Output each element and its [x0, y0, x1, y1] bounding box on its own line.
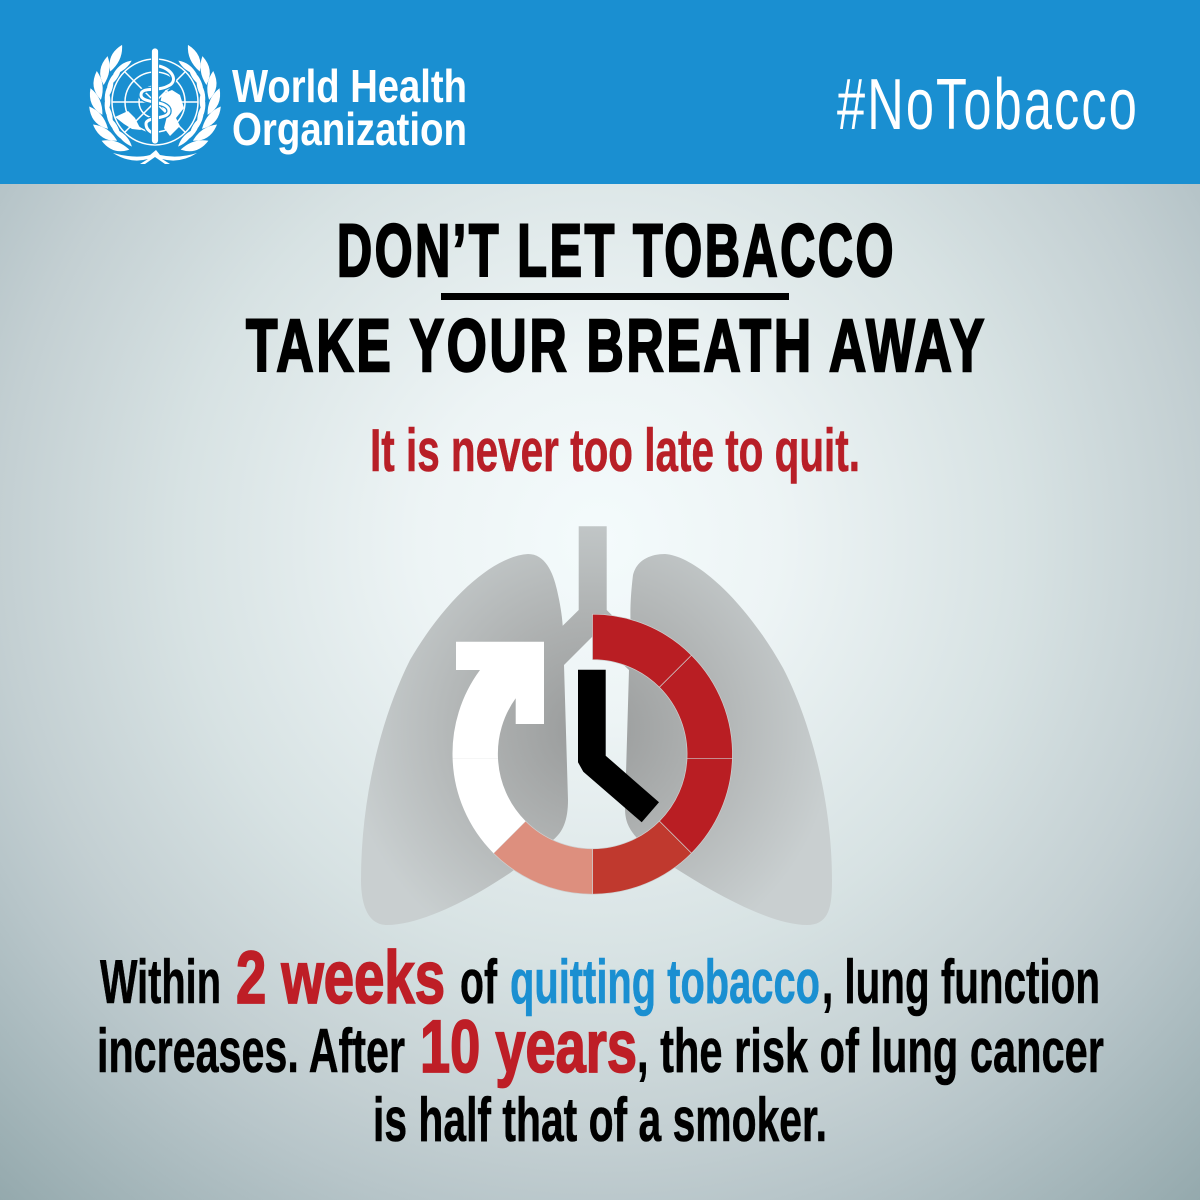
bottom message [97, 936, 1104, 1155]
icon: lungs [361, 526, 832, 925]
bottom message: quitting tobacco [510, 948, 820, 1017]
bottom message: Within [100, 948, 221, 1017]
subtitle: It is never too late to quit. [370, 417, 860, 484]
icon: WHO emblem [88, 44, 222, 164]
title: DON’T LET TOBACCO [337, 209, 896, 292]
WHO logo [88, 44, 467, 164]
title [246, 209, 987, 387]
organization name [232, 60, 467, 155]
bottom message: 2 weeks [236, 936, 445, 1019]
icon: white arrow [453, 642, 544, 758]
organization name: Organization [232, 103, 467, 155]
bottom message: 10 years [420, 1005, 637, 1088]
bottom message: of [460, 948, 497, 1017]
lungs and clock illustration [361, 526, 832, 925]
bottom message: increases. After [97, 1017, 405, 1086]
bottom message: is half that of a smoker. [373, 1086, 827, 1155]
clock ring [453, 614, 732, 894]
clock hands [578, 670, 659, 822]
header band [0, 0, 1200, 184]
organization name: World Health [232, 60, 467, 112]
